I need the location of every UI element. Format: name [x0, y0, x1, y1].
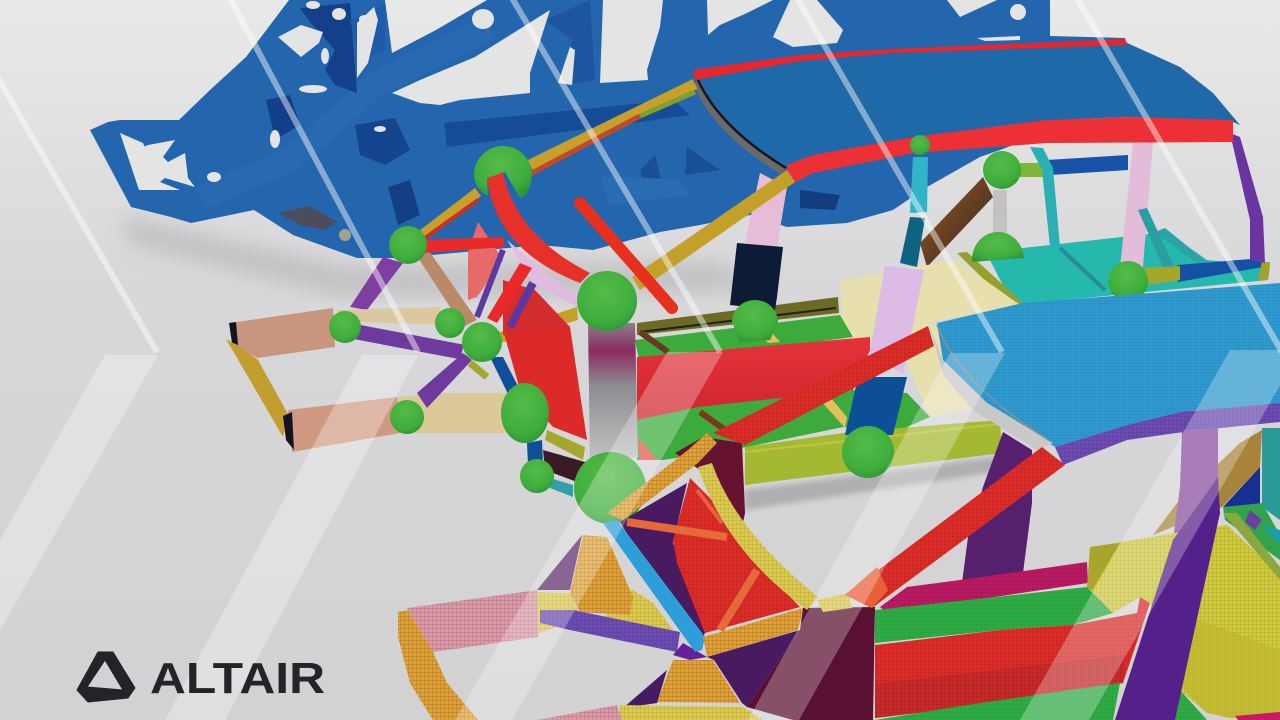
brown and purple bars	[413, 248, 477, 327]
upper gold rails	[632, 170, 795, 290]
holes through frame	[120, 0, 1026, 190]
Altair logo	[77, 652, 325, 703]
pillars	[745, 173, 787, 247]
topology optimised blue car frame	[90, 0, 1130, 258]
front box upper	[337, 307, 445, 342]
cut out lower oval	[278, 206, 337, 230]
dark lower junction	[543, 450, 585, 485]
rear right members	[1153, 430, 1262, 535]
icon: Altair triangle mark	[77, 652, 135, 702]
front box lower	[397, 393, 507, 433]
steel pillar	[588, 323, 638, 462]
lighter main beam	[200, 28, 490, 198]
roof	[697, 42, 1240, 170]
dark rail faces	[444, 100, 690, 147]
shadow under front sill	[745, 455, 1010, 510]
floor	[635, 315, 853, 365]
rear floor	[990, 232, 1270, 305]
beams	[603, 520, 705, 652]
logo wordmark: ALTAIR	[150, 654, 325, 703]
left bumper parts	[537, 535, 582, 590]
purple bars	[357, 332, 462, 352]
beam model car	[226, 39, 1270, 524]
light purple pillar	[1173, 428, 1218, 540]
green connector nodes	[329, 135, 1148, 524]
floor panels	[880, 562, 1088, 613]
gold rail continuing behind ball	[497, 307, 578, 343]
red panels behind	[468, 222, 503, 300]
meshed finite element car	[398, 283, 1280, 720]
lower cross member	[673, 643, 707, 660]
pink and red bars	[507, 240, 577, 307]
shadow under blue structure	[120, 215, 760, 295]
sill	[745, 420, 1002, 485]
cream block	[840, 260, 1020, 417]
purple mid pillar	[962, 432, 1032, 583]
roof mesh	[937, 283, 1280, 447]
central dark panels	[675, 437, 745, 560]
